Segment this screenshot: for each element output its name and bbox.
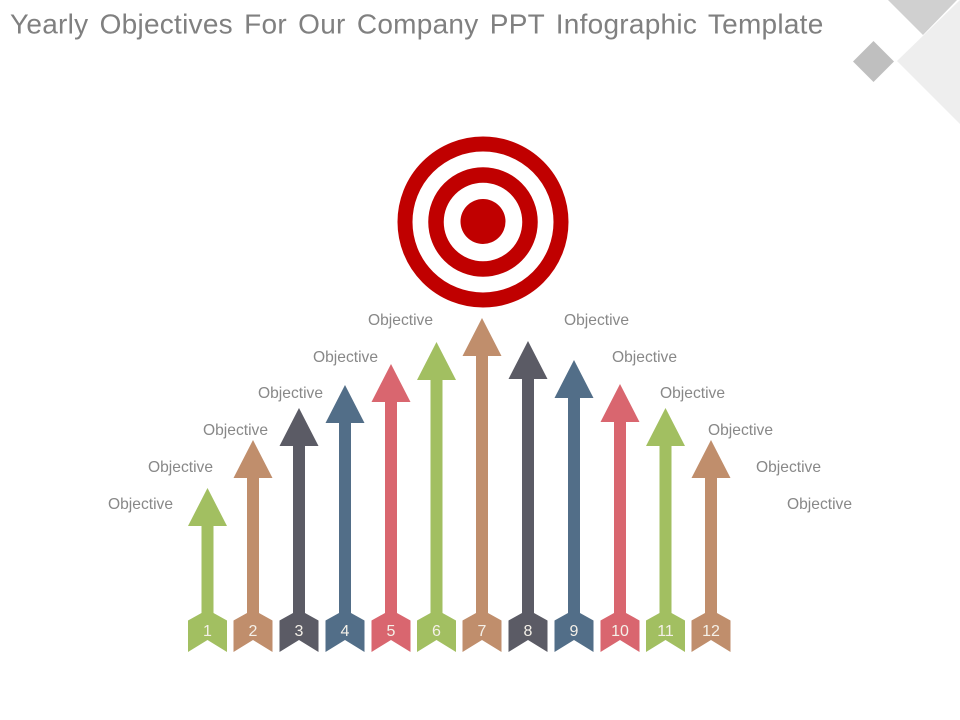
arrow 3 <box>280 408 318 652</box>
objective labels: Objective <box>368 312 433 329</box>
arrow 12: 12 <box>702 623 720 640</box>
arrow 7 <box>462 318 502 652</box>
decoration: corner diamonds <box>853 0 960 124</box>
objective labels: Objective <box>787 496 852 513</box>
arrow 11: 11 <box>657 623 674 640</box>
objective labels: Objective <box>612 349 677 366</box>
arrow 2 <box>234 440 272 652</box>
arrow 1: 1 <box>203 623 212 640</box>
objective labels: Objective <box>313 349 378 366</box>
arrow 9: 9 <box>570 623 579 640</box>
arrow 4: 4 <box>341 623 350 640</box>
arrow 4 <box>326 385 364 652</box>
arrow 7: 7 <box>478 623 487 640</box>
arrow 10: 10 <box>611 623 629 640</box>
arrow 6: 6 <box>432 623 441 640</box>
arrow 9 <box>554 360 594 652</box>
objective labels <box>108 312 852 513</box>
icon: target <box>405 144 561 300</box>
arrow 3: 3 <box>295 623 304 640</box>
arrow 8: 8 <box>524 623 533 640</box>
objective labels: Objective <box>108 496 173 513</box>
arrow 2: 2 <box>249 623 258 640</box>
arrow 12 <box>692 440 730 652</box>
arrow 1 <box>188 488 227 652</box>
title: Yearly Objectives For Our Company PPT Infographic Template <box>10 8 824 40</box>
arrow 11 <box>646 408 685 652</box>
objective labels: Objective <box>756 459 821 476</box>
arrow 10 <box>600 384 640 652</box>
objective labels: Objective <box>564 312 629 329</box>
arrow 5: 5 <box>387 623 396 640</box>
objective labels: Objective <box>258 385 323 402</box>
objective labels: Objective <box>203 422 268 439</box>
objective labels: Objective <box>148 459 213 476</box>
arrow 8 <box>508 341 548 652</box>
arrow 5 <box>372 364 410 652</box>
objective labels: Objective <box>708 422 773 439</box>
arrow 6 <box>417 342 456 652</box>
objective labels: Objective <box>660 385 725 402</box>
